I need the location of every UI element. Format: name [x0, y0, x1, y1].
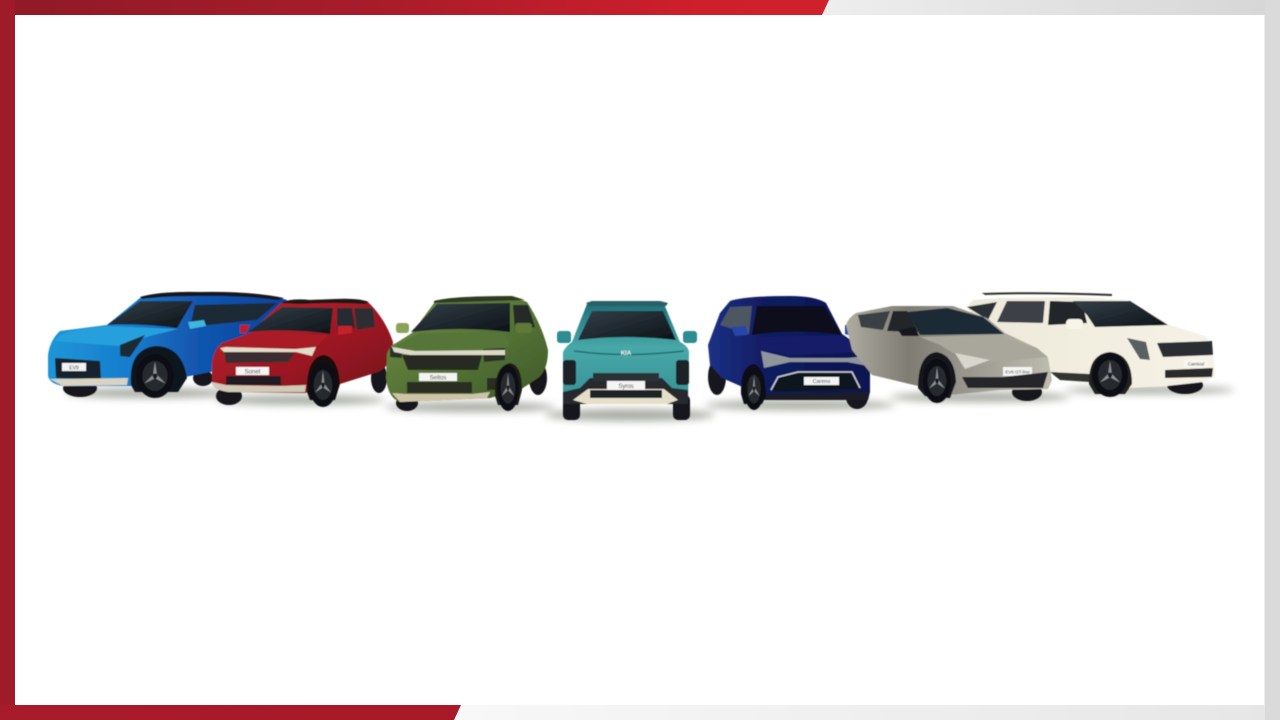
plate: Carnival: [1188, 362, 1204, 366]
car: Carens dark blue: [708, 296, 870, 410]
mirrors: [240, 325, 250, 333]
roof rails: [434, 296, 525, 303]
plate: Carens: [813, 379, 831, 385]
front low wheel: [1012, 383, 1042, 401]
roof rail: [140, 292, 284, 300]
windshield: [107, 301, 193, 328]
mirrors: [396, 323, 409, 333]
side wheel: [136, 354, 174, 398]
side windows: [190, 303, 277, 327]
mirror: [1066, 319, 1083, 329]
silver skid: [50, 378, 128, 386]
rear wheel: [371, 363, 387, 393]
windshield: [1073, 301, 1168, 327]
body: [48, 293, 287, 386]
roof rails: [281, 299, 368, 304]
roof rails: [982, 292, 1112, 296]
plate: Sonet: [245, 370, 261, 376]
lower grille: [226, 376, 281, 385]
wheel arch: [741, 364, 766, 404]
body: [386, 298, 548, 402]
hood: [757, 335, 865, 355]
headlights: [761, 351, 868, 368]
front low wheel: [396, 395, 418, 411]
mirror: [898, 327, 919, 336]
headlight: [120, 335, 145, 357]
lower bumper: [563, 378, 688, 404]
body: [846, 306, 1052, 395]
ground shadows: [65, 386, 1235, 421]
plate: Syros: [618, 384, 634, 390]
side wheel: [744, 368, 764, 410]
plate: EV9: [69, 366, 79, 372]
skid plate: [392, 392, 490, 402]
car: Seltos green: [386, 296, 548, 411]
plate: [804, 377, 839, 385]
front low wheel: [216, 387, 242, 405]
lower grille: [962, 372, 1048, 388]
mirrors: [731, 326, 748, 336]
body: [212, 300, 393, 393]
grille: [402, 355, 482, 370]
wheel arch: [131, 346, 187, 392]
front low wheel: [63, 379, 97, 397]
lower grille: [1165, 368, 1213, 378]
side windows: [997, 301, 1045, 323]
wheel arch: [495, 363, 522, 405]
body: [967, 297, 1215, 388]
mirror: [188, 320, 206, 329]
bumper: [763, 392, 870, 400]
side windows: [858, 311, 890, 330]
front low wheel: [1167, 376, 1203, 394]
car: Sonet red: [212, 299, 393, 407]
side windows: [720, 306, 752, 334]
lower grille: [772, 372, 862, 392]
roof rails: [586, 301, 668, 306]
lower grille: [407, 382, 472, 393]
grille: [224, 351, 295, 363]
hood: [222, 333, 328, 348]
windshield: [411, 303, 510, 332]
car: EV9 blue: [48, 292, 287, 398]
hood: [920, 335, 1048, 362]
hood crease: [574, 351, 684, 354]
plate: EV6 GT-line: [1005, 370, 1030, 374]
skid plate: [212, 382, 306, 392]
wheel arch: [307, 355, 340, 400]
car: Syros teal: [557, 301, 697, 420]
headlight: [955, 353, 990, 369]
plate: [1184, 360, 1208, 367]
headlights: [390, 347, 402, 358]
windshield: [907, 308, 1004, 335]
rear wheel: [529, 361, 547, 395]
car: Carnival cream: [967, 292, 1215, 397]
fog lamp: [487, 378, 498, 390]
headlights: [563, 360, 576, 385]
sill: [1050, 372, 1090, 382]
plate: [1003, 367, 1032, 376]
rear wheel: [193, 370, 213, 386]
vehicle line-up: [48, 292, 1215, 420]
body: [708, 296, 870, 400]
side wheel: [309, 363, 337, 407]
kia logo: KIA: [621, 351, 632, 357]
side windows: [513, 305, 535, 332]
skid plate: [573, 389, 678, 404]
plate: Seltos: [430, 376, 446, 382]
hood: [396, 333, 510, 350]
body: [563, 302, 689, 404]
plate: [62, 363, 86, 372]
windshield: [752, 306, 842, 335]
front wheels: [563, 395, 580, 420]
plate: [419, 373, 457, 382]
lower grille: [55, 358, 101, 380]
side windows: [337, 308, 355, 331]
plate: [236, 367, 269, 376]
front right wheel: [846, 385, 868, 409]
wheel arch: [918, 352, 956, 398]
mirrors: [557, 331, 571, 343]
windshield: [578, 311, 676, 340]
side wheel: [923, 359, 951, 403]
grille: [1157, 341, 1213, 357]
headlight: [1127, 338, 1150, 360]
rear wheel: [708, 359, 726, 395]
rear window: [967, 302, 997, 320]
lower grille: [590, 390, 662, 398]
side wheel: [1092, 353, 1128, 397]
side wheel: [497, 365, 519, 411]
hood: [55, 326, 178, 346]
car: EV6 silver: [846, 306, 1052, 403]
upper grille: [593, 373, 659, 381]
windshield: [248, 307, 333, 334]
wheel arch: [1089, 352, 1132, 394]
